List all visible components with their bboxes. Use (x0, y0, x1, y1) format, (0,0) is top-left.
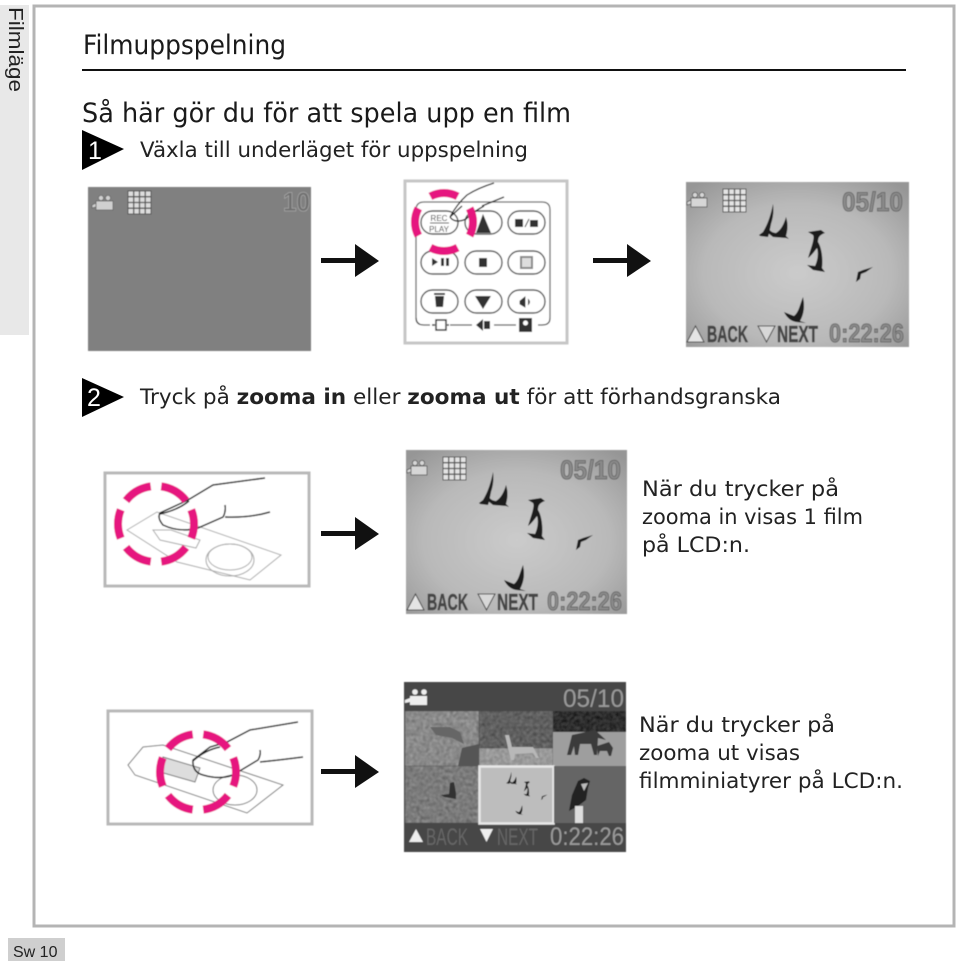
thumbnail: deer (479, 711, 553, 766)
device outline (127, 512, 281, 580)
zoom in caption: på LCD:n. (642, 532, 750, 557)
back and next labels: NEXT (777, 321, 818, 347)
zoom out caption (639, 712, 903, 793)
subheading: Så här gör du för att spela upp en film (82, 98, 571, 129)
arrow (321, 517, 379, 550)
side tab: Filmläge: Filmläge (4, 7, 26, 92)
counter: 05/10 (842, 187, 903, 217)
buttons (421, 211, 545, 313)
zoom in caption: När du trycker på (642, 476, 839, 501)
button frame (416, 202, 550, 325)
back and next labels: NEXT (497, 824, 538, 851)
page number tab (8, 938, 65, 961)
highlight ring (415, 193, 473, 251)
panel: zoom in finger (105, 473, 309, 586)
REC PLAY label: REC (431, 214, 448, 223)
finger (450, 183, 504, 221)
back and next labels: BACK (426, 824, 468, 851)
arrow (321, 244, 379, 277)
counter: 05/10 (560, 455, 621, 485)
highlight ring (160, 734, 236, 810)
icon: grid (443, 457, 466, 480)
icon: camera (92, 195, 113, 210)
screen: thumbnails (404, 682, 626, 852)
icon: camera (407, 460, 427, 475)
step 1 marker: 1 (88, 137, 102, 165)
thumbnail: kingfisher (554, 766, 626, 823)
zoom in caption (642, 476, 863, 557)
zoom out caption: När du trycker på (639, 712, 835, 737)
back and next labels (407, 589, 538, 615)
step 2 marker (82, 378, 124, 417)
time: 0:22:26 (547, 586, 622, 616)
back and next labels: NEXT (497, 589, 538, 615)
icon: grid (128, 191, 151, 214)
screen: empty LCD (88, 187, 311, 351)
counter: 10 (283, 187, 310, 217)
heading: Filmuppspelning (83, 30, 286, 61)
back and next labels: BACK (707, 321, 748, 347)
finger (159, 478, 270, 530)
thumbnail: horses (553, 711, 626, 766)
back and next labels: BACK (427, 589, 468, 615)
highlight ring (118, 486, 194, 562)
step 2 marker: 2 (87, 384, 101, 412)
REC PLAY label: PLAY (429, 225, 450, 234)
icon: grid (723, 189, 746, 212)
page number tab: Sw 10 (13, 944, 58, 961)
step 1 text: Växla till underläget för uppspelning (140, 138, 528, 163)
panel: camera buttons (405, 181, 567, 343)
time: 0:22:26 (550, 823, 624, 851)
time: 0:22:26 (829, 318, 904, 348)
icon: camera (405, 689, 427, 705)
panel: zoom out finger (108, 711, 312, 824)
zoom in caption: zooma in visas 1 film (642, 505, 863, 529)
thumbnail: flying bird (405, 766, 479, 823)
arrow (593, 244, 651, 277)
back and next labels (687, 321, 818, 347)
heading rule (82, 69, 906, 71)
finger (193, 722, 303, 778)
step 1 marker (82, 130, 124, 170)
REC PLAY label (429, 214, 450, 234)
arrow (321, 755, 379, 788)
step 2 text: Tryck på zooma in eller zooma ut för att förhandsgranska (139, 384, 781, 409)
button icons (432, 214, 538, 332)
side tab: Filmläge (0, 5, 29, 335)
counter: 05/10 (563, 685, 624, 713)
icon: camera (687, 192, 707, 207)
zoom out caption: filmminiatyrer på LCD:n. (639, 768, 903, 793)
zoom out caption: zooma ut visas (639, 741, 800, 765)
thumbnail: hare (405, 711, 479, 766)
device outline (128, 745, 283, 813)
screen: first film (686, 182, 909, 348)
thumbnail: selected birds (480, 766, 554, 824)
back and next labels (409, 824, 538, 851)
screen: single film (406, 450, 627, 616)
